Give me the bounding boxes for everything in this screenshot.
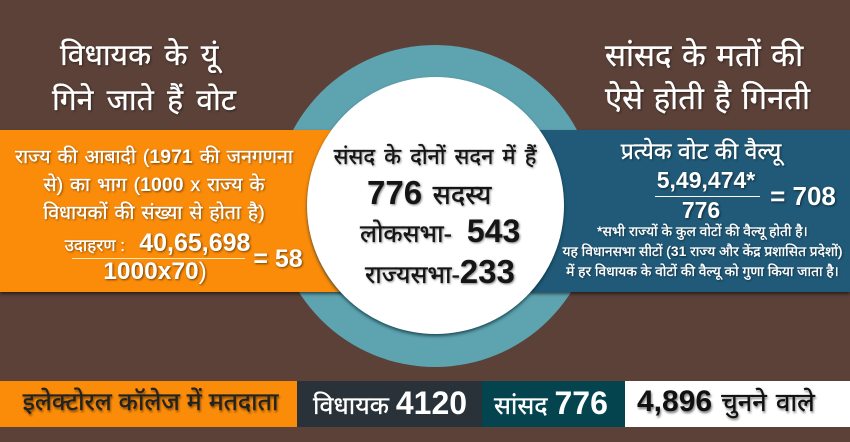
label: इलेक्टोरल कॉलेज में मतदाता xyxy=(23,388,278,416)
example numerator: उदाहरण : 40,65,698 xyxy=(65,229,250,257)
numerator: 5,49,474* xyxy=(657,167,755,193)
white center circle xyxy=(307,77,564,334)
example denominator: 1000x70) xyxy=(103,258,207,285)
fraction line xyxy=(655,196,760,197)
heading: left xyxy=(52,38,238,117)
panel heading: प्रत्येक वोट की वैल्यू xyxy=(621,138,781,164)
heading: left: विधायक के यूं xyxy=(60,39,218,72)
panel: left orange xyxy=(0,130,345,292)
center text xyxy=(333,144,539,290)
footnote: में हर विधायक के वोटों की वैल्यू को गुणा किया जाता है। xyxy=(566,264,839,279)
heading: right: सांसद के मतों की xyxy=(605,38,803,73)
line: Lok Sabha: लोकसभा- 543 xyxy=(360,213,520,249)
line: 776 members: 776 सदस्य xyxy=(367,174,491,211)
fraction line xyxy=(72,258,245,259)
heading: right: ऐसे होती है गिनती xyxy=(605,80,810,116)
footnote xyxy=(562,223,844,282)
heading: left: गिने जाते हैं वोट xyxy=(52,84,236,117)
line: Rajya Sabha: राज्यसभा-233 xyxy=(365,253,515,290)
rule text: राज्य की आबादी (1971 की जनगणना xyxy=(15,146,293,168)
label: 4,896 चुनने वाले xyxy=(637,385,815,418)
result: = 708 xyxy=(770,181,836,211)
teal ring xyxy=(274,45,596,367)
label: सांसद 776 xyxy=(494,385,608,421)
line: both houses: संसद के दोनों सदन में हैं xyxy=(334,144,536,169)
panel: right blue xyxy=(530,130,850,292)
rule text: विधायकों की संख्या से होता है) xyxy=(43,202,265,224)
heading: right xyxy=(604,38,812,116)
rule text xyxy=(14,145,296,226)
denominator: 776 xyxy=(682,197,720,223)
label: विधायक 4120 xyxy=(313,385,467,421)
bottom bar: MLAs xyxy=(297,381,482,427)
rule text: से) का भाग (1000 x राज्य के xyxy=(43,174,265,196)
bottom bar: MPs xyxy=(482,381,625,427)
bottom bar: electoral college xyxy=(0,381,297,427)
result: = 58 xyxy=(253,245,303,273)
footnote: यह विधानसभा सीटों (31 राज्य और केंद्र प्रशासित प्रदेशों) xyxy=(562,244,843,259)
bottom bar: total xyxy=(625,381,850,427)
footnote: *सभी राज्यों के कुल वोटों की वैल्यू होती है। xyxy=(597,224,808,239)
